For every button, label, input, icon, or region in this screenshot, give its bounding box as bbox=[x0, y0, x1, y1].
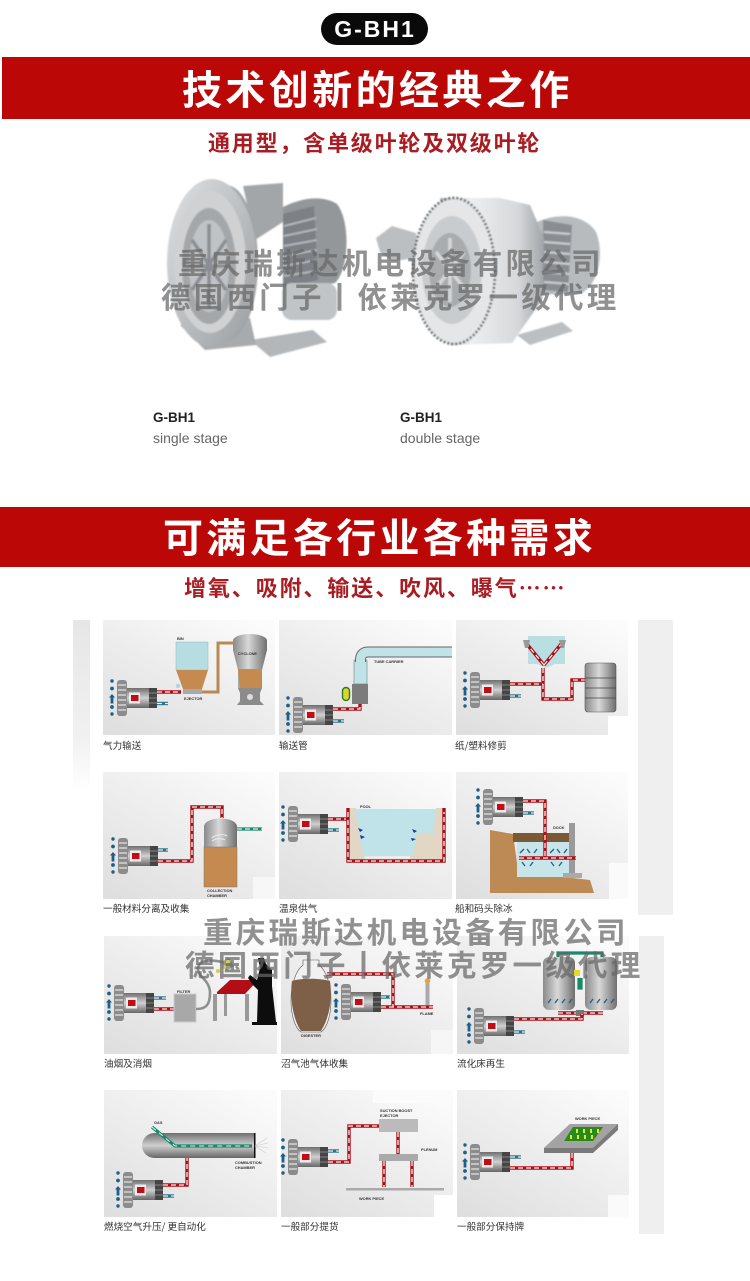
caption row one bbox=[103, 738, 507, 752]
banner: heading one: 技术创新的经典之作 bbox=[182, 58, 573, 116]
panel: general part holding bbox=[457, 1090, 629, 1217]
product caption: double stage: double stage bbox=[400, 430, 480, 446]
panel: material separation and collection bbox=[103, 772, 275, 899]
model badge: G-BH1 bbox=[334, 16, 416, 42]
product photo: double stage blower bbox=[376, 198, 600, 345]
product caption: single stage: G-BH1 bbox=[153, 410, 195, 425]
panel: biogas collection bbox=[281, 936, 453, 1054]
caption row four bbox=[104, 1219, 525, 1233]
panel: material separation and collection: COLLECTION bbox=[207, 888, 232, 893]
panel: hot spring aeration bbox=[279, 772, 452, 899]
panel: combustion air boost: GAS bbox=[154, 1120, 163, 1125]
panel: paper and plastic trimming bbox=[456, 620, 628, 735]
watermark: top: 德国西门子丨依莱克罗一级代理 bbox=[161, 275, 620, 317]
panel: combustion air boost: CHAMBER bbox=[235, 1165, 255, 1170]
product caption: double stage bbox=[400, 410, 480, 446]
subheading two: 增氧、吸附、输送、吹风、曝气…… bbox=[184, 571, 566, 603]
banner: heading two bbox=[0, 506, 750, 567]
watermark: lower: 德国西门子丨依莱克罗一级代理 bbox=[185, 943, 644, 985]
left grey strip bbox=[73, 620, 90, 790]
watermark: top bbox=[161, 241, 620, 317]
panel: combustion air boost bbox=[104, 1090, 277, 1217]
model badge bbox=[321, 13, 428, 45]
panel: combustion air boost: COMBUSTION bbox=[235, 1160, 262, 1165]
caption row one: 气力输送 bbox=[103, 738, 142, 752]
right grey strip lower bbox=[639, 936, 664, 1234]
caption row one: 输送管 bbox=[279, 738, 308, 752]
caption row four: 一般部分提货 bbox=[281, 1219, 339, 1233]
panel: fluidized bed regeneration bbox=[457, 936, 629, 1054]
panel: ship and dock de-icing: DOCK bbox=[553, 825, 565, 830]
panel: fume extraction bbox=[104, 936, 277, 1054]
product caption: double stage: G-BH1 bbox=[400, 410, 442, 425]
panel: general part lifting: SUCTION BOOST bbox=[380, 1108, 413, 1113]
panel: tube conveying bbox=[279, 620, 452, 735]
panel: general part lifting: WORK PIECE bbox=[359, 1196, 384, 1201]
banner: heading one bbox=[2, 57, 750, 119]
watermark: lower: 重庆瑞斯达机电设备有限公司 bbox=[203, 910, 629, 952]
panel: general part holding: WORK PIECE bbox=[575, 1116, 600, 1121]
right grey strip upper bbox=[638, 620, 673, 915]
panel: biogas collection: DIGESTER bbox=[301, 1033, 321, 1038]
caption row two bbox=[103, 901, 513, 915]
panel: fume extraction: FILTER bbox=[177, 989, 191, 994]
panel: ship and dock de-icing bbox=[456, 772, 628, 899]
caption row four: 一般部分保持牌 bbox=[457, 1219, 525, 1233]
caption row three: 沼气池气体收集 bbox=[281, 1056, 349, 1070]
product caption: single stage bbox=[153, 410, 228, 446]
watermark: top: 重庆瑞斯达机电设备有限公司 bbox=[178, 241, 604, 283]
panel: tube conveying: TUBE CARRIER bbox=[374, 659, 404, 664]
caption row two: 船和码头除冰 bbox=[455, 901, 513, 915]
caption row four: 燃烧空气升压/ 更自动化 bbox=[104, 1219, 206, 1233]
panel: pneumatic conveying: BIN bbox=[177, 636, 184, 641]
panel: material separation and collection: CHAMBER bbox=[207, 893, 227, 898]
panel: general part lifting: EJECTOR bbox=[380, 1113, 398, 1118]
panel: general part lifting bbox=[280, 1090, 453, 1217]
product caption: single stage: single stage bbox=[153, 430, 228, 446]
watermark: lower bbox=[185, 910, 644, 985]
caption row three bbox=[104, 1056, 505, 1070]
product photo: single stage blower bbox=[167, 179, 347, 357]
caption row one: 纸/塑料修剪 bbox=[455, 738, 507, 752]
subheading one: 通用型，含单级叶轮及双级叶轮 bbox=[208, 126, 541, 158]
caption row three: 油烟及消烟 bbox=[104, 1056, 152, 1070]
panel: general part lifting: PLENUM bbox=[421, 1147, 437, 1152]
caption row two: 温泉供气 bbox=[279, 901, 318, 915]
caption row two: 一般材料分离及收集 bbox=[103, 901, 190, 915]
panel: biogas collection: FLAME bbox=[420, 1011, 434, 1016]
panel: pneumatic conveying: CYCLONE bbox=[238, 651, 257, 656]
panel: hot spring aeration: POOL bbox=[360, 804, 372, 809]
panel: pneumatic conveying bbox=[103, 620, 275, 735]
panel: pneumatic conveying: EJECTOR bbox=[184, 696, 202, 701]
caption row three: 流化床再生 bbox=[457, 1056, 505, 1070]
banner: heading two: 可满足各行业各种需求 bbox=[163, 506, 596, 564]
